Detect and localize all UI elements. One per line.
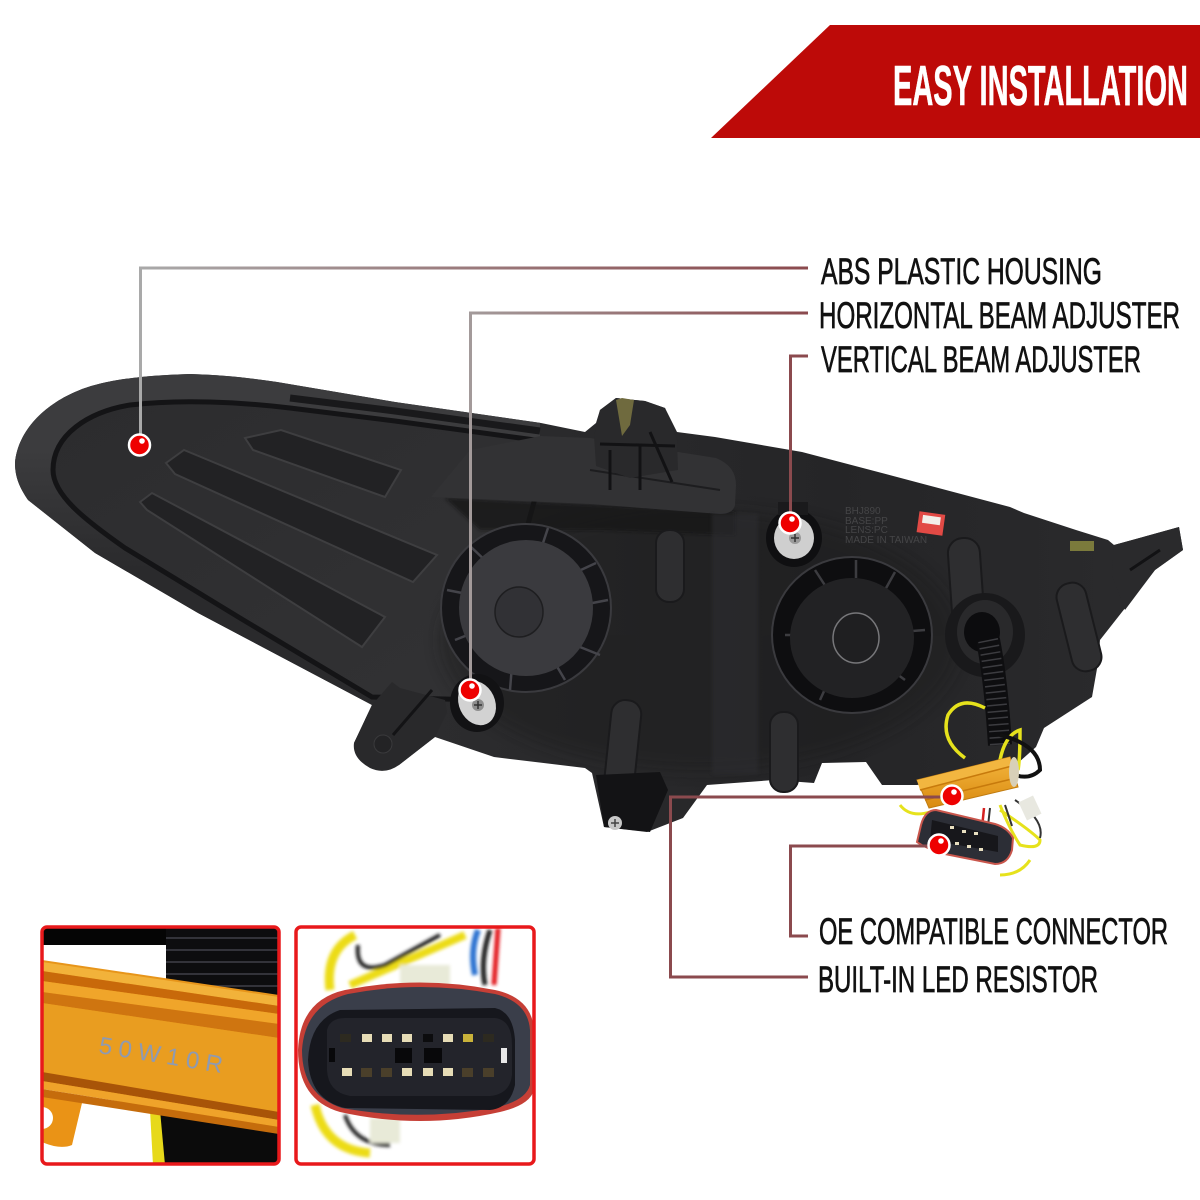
molded text and QC label: LENS:PC [845,525,888,536]
connector [917,810,1013,864]
LED resistor [917,757,1019,808]
molded text and QC label: BHJ890 [845,506,881,517]
yellow wires [946,703,1020,770]
housing silhouette [15,374,1183,832]
leader: ABS plastic housing [140,268,808,445]
molded text and QC label: BASE:PP [845,516,888,527]
middle rib [166,450,437,582]
plate ribs [140,430,437,647]
leader lines [140,268,950,977]
molded text and QC label [845,506,945,546]
connector shell [298,982,534,1121]
leader: connector [790,846,938,936]
blurred wires [315,928,498,1153]
leader: vertical beam adjuster [790,356,808,523]
panel: connector close-up [296,927,534,1164]
keying cutouts [329,1048,442,1063]
gold resistor body [42,960,279,1134]
outer rim [10,370,425,720]
corrugated loom [166,929,278,995]
high beam dust cap [772,557,932,713]
corrugated loom [988,640,1000,745]
dot: vertical adjuster [780,512,800,534]
bottom screw mount [596,772,668,832]
leader: LED resistor [670,797,950,977]
leader: horizontal beam adjuster [470,313,808,690]
low beam dust cap [441,524,611,692]
right adjuster screw [766,502,822,567]
upper rib [245,430,401,497]
top clip [594,398,678,478]
headlight rear housing [10,370,1183,875]
dot: horizontal adjuster [460,680,480,700]
wiring harness [900,640,1041,875]
connector face [327,1018,512,1096]
wire grommet [945,593,1025,677]
resistor marking: 50W10R [97,1032,225,1079]
panel: resistor close-up [31,927,279,1165]
mounting tab [42,1095,82,1147]
lower cables [160,1116,278,1162]
under-block shadow [445,498,735,535]
right clip [1070,527,1183,610]
feature labels [818,251,1180,1000]
dot: connector [928,834,950,856]
left mounting bracket [354,682,447,771]
dot: housing [129,434,150,456]
callout dots [129,434,962,856]
darker central shade [444,637,540,724]
left adjuster screw [450,674,504,732]
molded posts [603,530,1104,792]
pin slots [340,1034,494,1077]
lower rib [140,493,385,647]
plate surface [53,402,540,700]
top black band [44,928,166,945]
vertical spine [713,515,756,762]
banner [711,25,1200,138]
dot: resistor [942,786,962,806]
upper shoulder [431,436,736,514]
molded text and QC label: MADE IN TAIWAN [845,535,927,546]
